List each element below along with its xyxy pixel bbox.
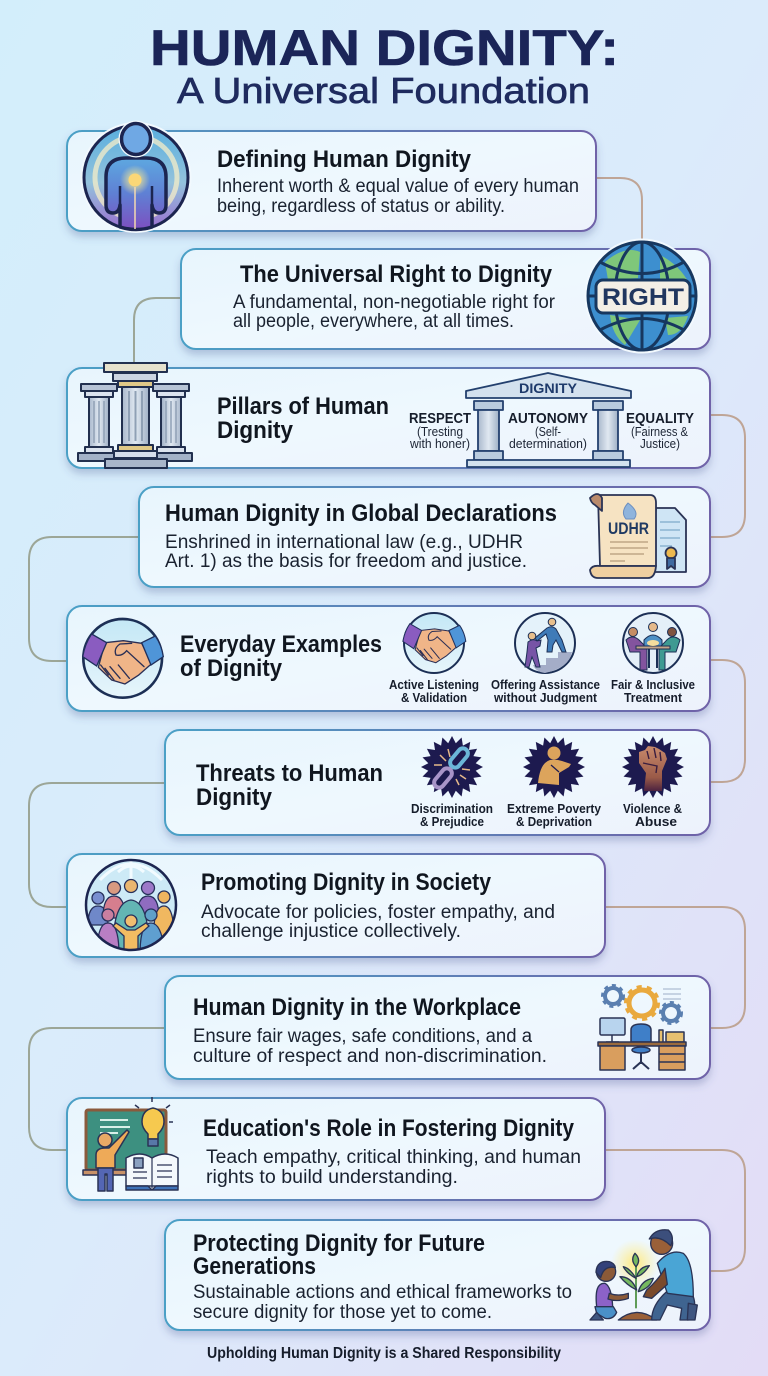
icon: UDHR scroll and certificate bbox=[590, 494, 686, 578]
heading: Pillars of Human bbox=[217, 393, 389, 420]
threat labels: Abuse bbox=[635, 814, 677, 829]
icon: community group bbox=[86, 860, 176, 955]
udhr label: UDHR bbox=[608, 519, 649, 538]
threat labels: & Prejudice bbox=[420, 814, 484, 829]
example labels: Treatment bbox=[624, 690, 683, 705]
description bbox=[233, 292, 556, 332]
pillar labels: (Fairness & bbox=[631, 424, 688, 439]
example labels: Offering Assistance bbox=[491, 677, 600, 692]
panel: global declarations bbox=[139, 487, 710, 587]
heading: Defining Human Dignity bbox=[217, 146, 472, 173]
panel: education bbox=[67, 1097, 605, 1200]
panel: threats bbox=[165, 730, 710, 835]
pillar labels: (Tresting bbox=[417, 424, 463, 439]
description: Advocate for policies, foster empathy, and bbox=[201, 902, 555, 923]
panel: everyday examples bbox=[67, 606, 710, 711]
icon: glowing person bbox=[80, 120, 192, 233]
description: secure dignity for those yet to come. bbox=[193, 1302, 492, 1323]
icon: raised fist bbox=[622, 736, 684, 798]
description bbox=[193, 1282, 572, 1323]
pillar labels bbox=[409, 410, 694, 451]
description: Inherent worth & equal value of every human bbox=[217, 176, 579, 197]
heading: of Dignity bbox=[180, 655, 283, 682]
heading: Dignity bbox=[217, 417, 294, 444]
pillar labels: with honer) bbox=[409, 436, 470, 451]
icon: globe with RIGHT label bbox=[584, 238, 700, 354]
heading: The Universal Right to Dignity bbox=[240, 261, 553, 288]
description: Art. 1) as the basis for freedom and justice. bbox=[165, 551, 527, 572]
panel: promoting dignity bbox=[67, 854, 605, 957]
title: HUMAN DIGNITY: bbox=[150, 20, 619, 76]
threat labels: Discrimination bbox=[411, 801, 493, 816]
description: Sustainable actions and ethical frameworks to bbox=[193, 1282, 572, 1303]
panel: workplace bbox=[165, 976, 710, 1079]
panel: defining human dignity bbox=[67, 120, 596, 233]
pillar labels: RESPECT bbox=[409, 410, 471, 427]
description: challenge injustice collectively. bbox=[201, 921, 461, 942]
icon: inclusive table bbox=[623, 613, 683, 673]
description: Teach empathy, critical thinking, and human bbox=[206, 1147, 581, 1168]
example labels: & Validation bbox=[401, 690, 467, 705]
pillar labels: (Self- bbox=[535, 424, 561, 439]
icon: handshake bbox=[83, 619, 163, 698]
threat labels: & Deprivation bbox=[516, 814, 592, 829]
icon: office desk and gears bbox=[598, 986, 686, 1070]
heading: Education's Role in Fostering Dignity bbox=[203, 1115, 575, 1142]
description: all people, everywhere, at all times. bbox=[233, 311, 514, 332]
description: culture of respect and non-discrimination. bbox=[193, 1046, 547, 1067]
description bbox=[193, 1026, 547, 1067]
panel: future generations bbox=[165, 1220, 710, 1330]
icon: adult and child planting bbox=[590, 1230, 697, 1320]
example labels: Fair & Inclusive bbox=[611, 677, 695, 692]
icon: offering assistance bbox=[515, 613, 575, 673]
icon: globe with RIGHT label: RIGHT bbox=[602, 284, 684, 311]
description bbox=[165, 532, 527, 572]
heading: Protecting Dignity for Future bbox=[193, 1230, 485, 1257]
heading bbox=[196, 760, 383, 811]
icon: crouching figure bbox=[523, 736, 585, 798]
description bbox=[201, 902, 555, 942]
description bbox=[206, 1147, 581, 1188]
heading bbox=[193, 1230, 485, 1280]
connectors between panels bbox=[29, 178, 745, 1271]
heading bbox=[217, 393, 389, 444]
description: A fundamental, non-negotiable right for bbox=[233, 292, 556, 313]
heading: Generations bbox=[193, 1253, 316, 1280]
threat labels bbox=[411, 801, 682, 829]
description: rights to build understanding. bbox=[206, 1167, 458, 1188]
pillar labels: determination) bbox=[509, 436, 587, 451]
pillar labels: EQUALITY bbox=[626, 410, 694, 427]
heading: Human Dignity in the Workplace bbox=[193, 994, 521, 1021]
diagram: dignity temple bbox=[466, 373, 631, 467]
title: A Universal Foundation bbox=[177, 70, 590, 111]
example labels: Active Listening bbox=[389, 677, 479, 692]
heading: Promoting Dignity in Society bbox=[201, 869, 492, 896]
example labels: without Judgment bbox=[493, 690, 598, 705]
description: being, regardless of status or ability. bbox=[217, 196, 505, 217]
heading: Human Dignity in Global Declarations bbox=[165, 500, 557, 527]
example labels bbox=[389, 677, 695, 705]
description: Enshrined in international law (e.g., UDHR bbox=[165, 532, 523, 553]
icon: broken chain bbox=[421, 736, 483, 798]
pillar labels: AUTONOMY bbox=[508, 410, 588, 427]
icon: listening handshake bbox=[403, 613, 466, 673]
icon: teacher, chalkboard, lightbulb and book bbox=[83, 1097, 178, 1191]
title bbox=[150, 20, 619, 111]
heading: Dignity bbox=[196, 784, 273, 811]
description: Ensure fair wages, safe conditions, and a bbox=[193, 1026, 532, 1047]
temple roof label: DIGNITY bbox=[519, 380, 578, 396]
threat labels: Extreme Poverty bbox=[507, 801, 602, 816]
heading bbox=[180, 631, 382, 682]
heading: Everyday Examples bbox=[180, 631, 382, 658]
heading: Threats to Human bbox=[196, 760, 383, 787]
panel: universal right bbox=[181, 238, 710, 354]
icon: three pillars bbox=[78, 363, 192, 468]
description bbox=[217, 176, 579, 217]
panel: pillars bbox=[67, 363, 710, 468]
threat labels: Violence & bbox=[623, 801, 682, 816]
pillar labels: Justice) bbox=[640, 436, 680, 451]
footer tagline: Upholding Human Dignity is a Shared Responsibility bbox=[207, 1345, 561, 1362]
